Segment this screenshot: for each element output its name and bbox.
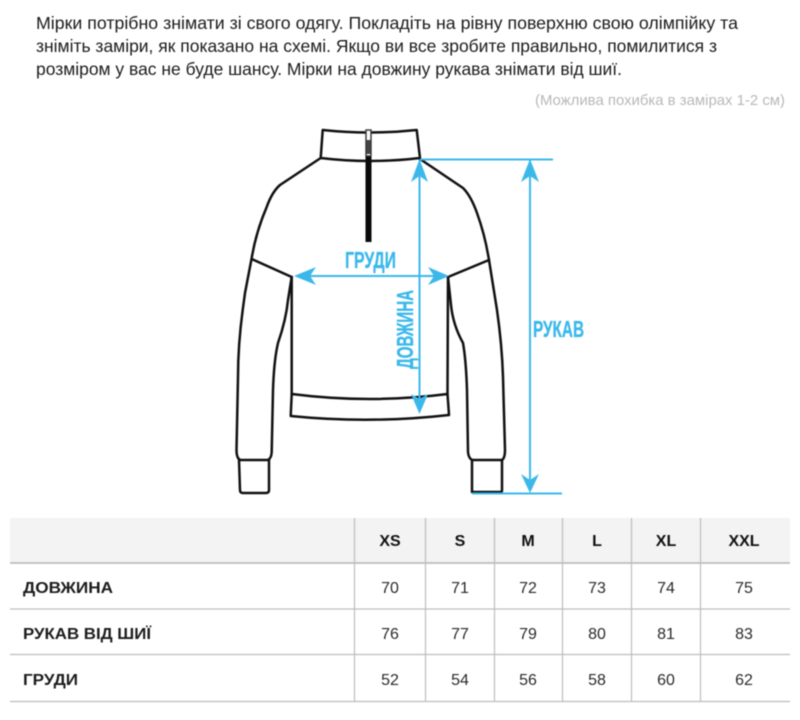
jacket outline diagram (236, 130, 505, 493)
intro text block: розміром у вас не буде шансу. Мірки на довжину рукава знімати від шиї. (36, 59, 622, 79)
row: sleeve from neck: 80 (588, 626, 606, 643)
row: length: 73 (588, 580, 606, 597)
label: length: ДОВЖИНА (392, 290, 418, 369)
row: sleeve from neck (23, 625, 753, 643)
row: length: 75 (735, 580, 753, 597)
intro text block (36, 13, 738, 79)
table header row: S (455, 533, 466, 550)
row: length (23, 580, 753, 597)
collar (321, 130, 420, 161)
row: length: 72 (519, 580, 537, 597)
table header row: XL (656, 533, 676, 550)
row: chest: 62 (735, 672, 753, 689)
left cuff (239, 460, 269, 493)
row: chest: 58 (588, 672, 606, 689)
table header row: M (521, 533, 535, 550)
label: sleeve: РУКАВ (533, 316, 584, 342)
table grid (10, 518, 790, 702)
row: length: ДОВЖИНА (23, 580, 113, 597)
hem (291, 394, 449, 420)
row: sleeve from neck: 83 (735, 626, 753, 643)
intro text block: Мірки потрібно знімати зі свого одягу. Покладіть на рівну поверхню свою олімпійку та (36, 13, 738, 33)
row: sleeve from neck: РУКАВ ВІД ШИЇ (23, 625, 152, 643)
left sleeve seam (252, 259, 292, 277)
row: chest: 60 (657, 672, 675, 689)
row: length: 70 (381, 580, 399, 597)
right sleeve and shoulder (420, 159, 505, 460)
row: length: 71 (451, 580, 469, 597)
table header row: XS (379, 533, 401, 550)
intro text block: зніміть заміри, як показано на схемі. Якщо ви все зробите правильно, помилитися з (36, 36, 717, 56)
row: chest (23, 672, 753, 689)
table header row: L (592, 533, 602, 550)
right sleeve seam (448, 260, 489, 277)
length arrow: body (411, 159, 428, 414)
row: chest: 56 (519, 672, 537, 689)
table header row: XXL (728, 533, 760, 550)
row: sleeve from neck: 76 (381, 626, 399, 643)
table header row (379, 533, 760, 550)
body sides (292, 277, 448, 394)
length arrow: sleeve (420, 159, 562, 494)
zipper (366, 130, 372, 242)
measurement error note: (Можлива похибка в замірах 1-2 см) (535, 93, 785, 109)
label: chest: ГРУДИ (345, 247, 396, 273)
table header background (10, 518, 790, 563)
right cuff (472, 460, 502, 492)
left sleeve and shoulder (236, 158, 321, 460)
row: length: 74 (657, 580, 675, 597)
row: chest: 52 (381, 672, 399, 689)
row: chest: 54 (451, 672, 469, 689)
width arrow: chest (294, 267, 449, 285)
row: sleeve from neck: 79 (519, 626, 537, 643)
size table (10, 518, 790, 702)
row: sleeve from neck: 77 (451, 626, 469, 643)
row: chest: ГРУДИ (23, 672, 78, 689)
row: sleeve from neck: 81 (657, 626, 675, 643)
